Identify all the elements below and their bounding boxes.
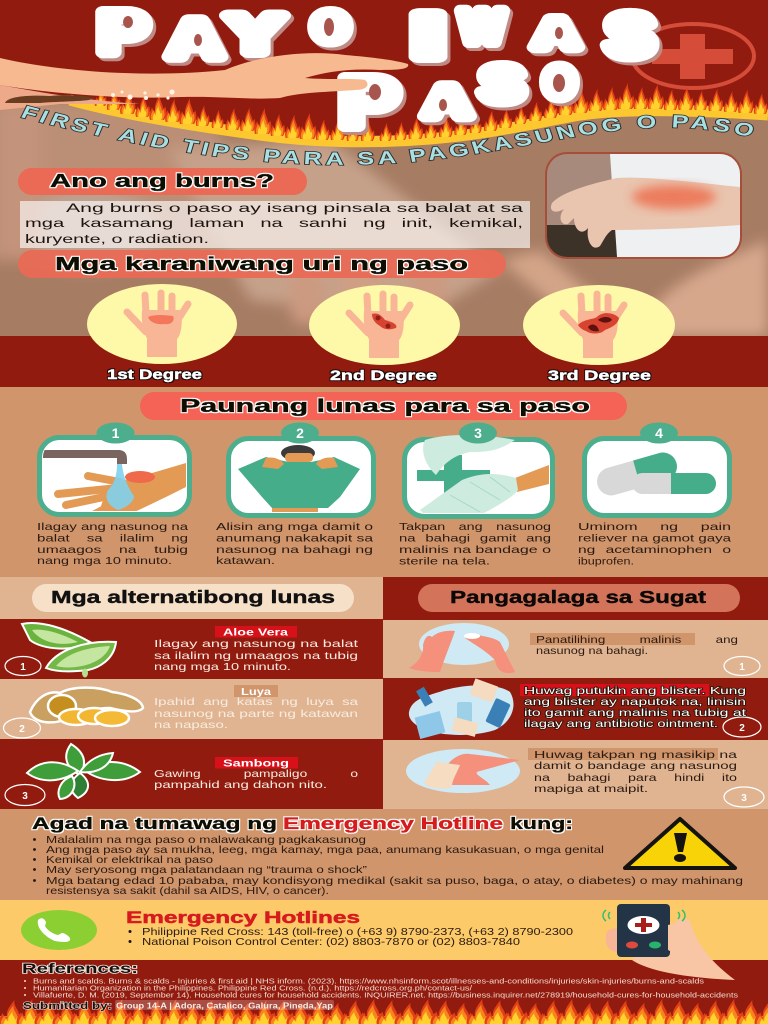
panel: when to call bbox=[0, 809, 768, 900]
text: step 3: malinis na bandage o bbox=[399, 544, 551, 556]
tag: luya: Luya bbox=[241, 686, 271, 698]
text: step 4: ibuprofen. bbox=[578, 556, 634, 568]
list: hotlines bbox=[128, 926, 573, 948]
text: step 2: Alisin ang mga damit o bbox=[216, 521, 373, 533]
list: references: Villafuerte, D. M. (2019, September 14). Household cures for household accidents. INQUIRER.net. https://business.inquirer.net/278919/household-cures-for-household-accidents bbox=[33, 992, 739, 1000]
title: Payo Iwas Paso bbox=[98, 0, 655, 141]
text: step 1: umaagos na tubig bbox=[37, 544, 188, 556]
text: wound care 2: ito gamit ang malinis na tubig at bbox=[524, 707, 746, 719]
heading: agad na tumawag bbox=[32, 814, 573, 833]
text: step 2: nasunog na bahagi ng bbox=[216, 544, 373, 556]
icon: medical cross circle bbox=[632, 24, 754, 88]
panel: alternative remedies bbox=[0, 577, 383, 809]
list: warning signs: resistensya sa sakit (dahil sa AIDS, HIV, o cancer). bbox=[46, 885, 329, 897]
text block: burns definition: kuryente, o radiation. bbox=[25, 234, 209, 246]
list: warning signs: Kemikal or elektrikal na paso bbox=[46, 854, 213, 866]
text: wound care 3: na bahagi para hindi ito bbox=[534, 772, 737, 784]
text: luya: na napaso. bbox=[154, 719, 228, 731]
icon: third degree burn bbox=[523, 285, 675, 365]
text: wound care 2 bbox=[520, 684, 746, 730]
icon: second degree burn bbox=[309, 285, 460, 365]
title: Payo Iwas Paso: A bbox=[168, 10, 222, 69]
label: 2nd degree: 2nd Degree bbox=[330, 368, 438, 383]
icon: aloe vera bbox=[22, 623, 116, 678]
heading: paunang lunas bbox=[140, 392, 627, 420]
text: wound care 3 bbox=[528, 748, 737, 795]
heading: alternatibong lunas: Mga alternatibong lunas bbox=[51, 587, 335, 607]
text block: burns definition bbox=[20, 201, 530, 248]
list: hotlines: National Poison Control Center: (02) 8803-7870 or (02) 8803-7840 bbox=[142, 936, 520, 948]
number 2 right: 2 bbox=[739, 723, 745, 734]
text: step 4: reliever na gamot gaya bbox=[578, 532, 731, 544]
list: warning signs: Malalalim na mga paso o malawakang pagkakasunog bbox=[46, 834, 366, 846]
list: warning signs bbox=[33, 834, 743, 897]
text block: burns definition: Ang burns o paso ay isang pinsala sa balat at sa bbox=[66, 203, 524, 215]
text: aloe vera: sa ilalim ng umaagos na tubig bbox=[154, 650, 358, 662]
text: sambong: Gawing pampaligo o bbox=[154, 768, 358, 780]
text: step 1 bbox=[37, 521, 188, 567]
heading: alternatibong lunas bbox=[32, 584, 354, 612]
number 2 right bbox=[723, 717, 761, 737]
heading: paunang lunas: Paunang lunas para sa paso bbox=[180, 396, 590, 416]
heading: pangagalaga sa sugat: Pangagalaga sa Sugat bbox=[450, 587, 706, 607]
text: step 3: na bahagi gamit ang bbox=[399, 532, 551, 544]
text: step 3 bbox=[399, 521, 551, 568]
list: warning signs: Mga batang edad 10 pababa, may kondisyong medikal (sakit sa puso, baga, o atay, o diabetes) o may mahinang bbox=[46, 875, 743, 887]
title: Payo Iwas Paso: A bbox=[424, 77, 470, 126]
number 3 left: 3 bbox=[22, 791, 28, 802]
list: hotlines: Philippine Red Cross: 143 (toll-free) o (+63 9) 8790-2373, (+63 2) 8790-2300 bbox=[142, 926, 573, 938]
number 2 left: 2 bbox=[19, 724, 25, 735]
panel: first aid bbox=[0, 387, 768, 577]
badge 4: 4 bbox=[655, 425, 663, 441]
title: Payo Iwas Paso: P bbox=[98, 0, 148, 65]
text: sambong bbox=[154, 768, 358, 791]
icon: first degree burn bbox=[87, 284, 237, 364]
icon: warning triangle bbox=[625, 819, 735, 868]
badge 2 bbox=[281, 422, 319, 444]
number 2 left bbox=[4, 718, 40, 738]
badge 4 bbox=[640, 422, 678, 444]
number 1 left bbox=[5, 656, 41, 676]
text: wound care 2: ang blister ay naputok na, linisin bbox=[524, 696, 746, 708]
text: submitted by: Group 14-A | Adora, Catalico, Galura, Pineda,Yap bbox=[116, 1002, 333, 1010]
panel: references bbox=[0, 960, 768, 1024]
step 1 card bbox=[40, 438, 190, 514]
heading: ano ang burns bbox=[18, 168, 307, 195]
text: luya: Ipahid ang katas ng luya sa bbox=[154, 696, 358, 708]
number 3 right bbox=[724, 787, 764, 807]
text: wound care 1: nasunog na bahagi. bbox=[536, 645, 648, 657]
list: references: Humanitarian Organization in the Philippines. Philippine Red Cross. (n.d.). https://redcross.org.ph/contact-us/ bbox=[33, 986, 472, 992]
heading: pangagalaga sa sugat bbox=[418, 584, 740, 612]
list: warning signs: Ang mga paso ay sa mukha, leeg, mga kamay, mga paa, anumang kasukasuan, o mga genital bbox=[46, 844, 604, 856]
text: step 2 bbox=[216, 521, 373, 567]
text: aloe vera: nang mga 10 minuto. bbox=[154, 661, 291, 673]
badge 3: 3 bbox=[474, 425, 482, 441]
title: Payo Iwas Paso: P bbox=[339, 63, 399, 141]
panel: wound care bbox=[383, 577, 768, 809]
heading: agad na tumawag: Emergency Hotline bbox=[283, 814, 503, 833]
number 3 left bbox=[5, 784, 45, 806]
background: burn care photo bbox=[0, 90, 768, 336]
text: wound care 1: Panatilihing malinis ang bbox=[536, 634, 738, 646]
panel: emergency hotlines bbox=[0, 900, 768, 960]
title: Payo Iwas Paso: O bbox=[543, 58, 576, 107]
text: step 1: nang mga 10 minuto. bbox=[37, 555, 172, 567]
number 1 left: 1 bbox=[20, 662, 26, 673]
list: warning signs: May seryosong mga palatandaan ng “trauma o shock” bbox=[46, 864, 368, 876]
heading: mga karaniwang uri ng paso bbox=[18, 250, 506, 278]
icon: phone bbox=[21, 910, 97, 950]
heading: agad na tumawag: Agad na tumawag ng bbox=[32, 814, 277, 833]
text: aloe vera bbox=[154, 638, 358, 673]
text: step 3: sterile na tela. bbox=[399, 556, 490, 568]
number 1 right: 1 bbox=[739, 662, 745, 673]
badge 1 bbox=[96, 422, 134, 444]
icon: hand holding phone bbox=[603, 904, 735, 980]
text block: burns definition: mga kasamang laman na sanhi ng init, kemikal, bbox=[25, 218, 523, 230]
number 3 right: 3 bbox=[741, 793, 747, 804]
text: step 2: anumang nakakapit sa bbox=[216, 532, 373, 544]
step 4 card bbox=[584, 438, 730, 516]
step 3 card bbox=[404, 435, 552, 516]
text: wound care 3: mapiga at maipit. bbox=[534, 783, 648, 795]
icon: bandaged arm bbox=[406, 749, 520, 793]
text: step 4 bbox=[578, 521, 731, 568]
text: wound care 2: Huwag putukin ang blister. Kung bbox=[524, 685, 746, 697]
icon: sambong leaves bbox=[27, 744, 140, 799]
badge 1: 1 bbox=[112, 425, 120, 441]
flames: bottom border bbox=[0, 999, 768, 1024]
text: submitted by: Submitted by: bbox=[23, 1001, 112, 1012]
title: Payo Iwas Paso: S bbox=[480, 56, 524, 112]
text: step 4: Uminom ng pain bbox=[578, 521, 731, 533]
degrees band bbox=[0, 336, 768, 387]
label: 1st degree: 1st Degree bbox=[107, 367, 203, 382]
text: luya: nasunog na parte ng katawan bbox=[154, 708, 358, 720]
heading: ano ang burns: Ano ang burns? bbox=[50, 171, 274, 191]
tag: sambong: Sambong bbox=[223, 758, 289, 770]
text: luya bbox=[154, 696, 358, 731]
heading: mga karaniwang uri ng paso: Mga karaniwang uri ng paso bbox=[55, 254, 468, 274]
text: step 3: Takpan ang nasunog bbox=[399, 521, 551, 533]
title: Payo Iwas Paso: O bbox=[312, 3, 349, 50]
title: Payo Iwas Paso: W bbox=[460, 1, 505, 52]
text: step 1: balat sa ilalim ng bbox=[37, 532, 188, 544]
photo: burned hand bbox=[545, 152, 742, 259]
tag: luya bbox=[234, 685, 278, 698]
tag: aloe vera bbox=[215, 626, 297, 638]
text: wound care 3: Huwag takpan ng masikip na bbox=[534, 749, 737, 761]
header background bbox=[0, 0, 768, 136]
heading: agad na tumawag: kung: bbox=[510, 814, 573, 833]
text: wound care 3: damit o bandage ang nasunog bbox=[534, 760, 737, 772]
title: Payo Iwas Paso: I bbox=[412, 2, 444, 71]
title: Payo Iwas Paso: A bbox=[534, 10, 578, 56]
tag: sambong bbox=[215, 757, 298, 770]
text: wound care 2: ilagay ang antibiotic ointment. bbox=[524, 718, 718, 730]
badge 2: 2 bbox=[296, 425, 304, 441]
text: step 1: Ilagay ang nasunog na bbox=[37, 521, 188, 533]
step 2 card bbox=[228, 438, 374, 516]
text: sambong: pampahid ang dahon nito. bbox=[154, 779, 327, 791]
text: submitted by bbox=[23, 1000, 334, 1012]
list: references bbox=[24, 978, 739, 1000]
illustration: burned arm and hand bbox=[0, 53, 408, 110]
subtitle: first aid tips: FIRST AID TIPS PARA SA PAGKASUNOG O PASO bbox=[20, 104, 754, 166]
list: references: Burns and scalds. Burns & scalds - Injuries & first aid | NHS inform. (2023). https://www.nhsinform.scot/illnesses-and-conditions/injuries/skin-injuries/burns-and-scalds bbox=[33, 978, 705, 986]
number 1 right bbox=[724, 656, 760, 676]
title: Payo Iwas Paso: S bbox=[605, 2, 655, 69]
tag: aloe vera: Aloe Vera bbox=[223, 626, 288, 638]
heading: references: References: bbox=[22, 961, 138, 976]
icon: ginger bbox=[30, 688, 143, 726]
text: wound care 1 bbox=[530, 633, 738, 657]
label: 3rd degree: 3rd Degree bbox=[548, 368, 652, 383]
flame wave bbox=[70, 83, 768, 142]
badge 3 bbox=[459, 422, 497, 444]
title: Payo Iwas Paso: Y bbox=[227, 5, 283, 64]
icon: cleaning hands bbox=[409, 623, 515, 673]
text: step 2: katawan. bbox=[216, 555, 275, 567]
icon: first aid supplies bbox=[409, 678, 514, 739]
heading: emergency hotlines: Emergency Hotlines bbox=[126, 908, 360, 927]
text: step 4: ng acetaminophen o bbox=[578, 544, 731, 556]
text: aloe vera: Ilagay ang nasunog na balat bbox=[154, 638, 358, 650]
